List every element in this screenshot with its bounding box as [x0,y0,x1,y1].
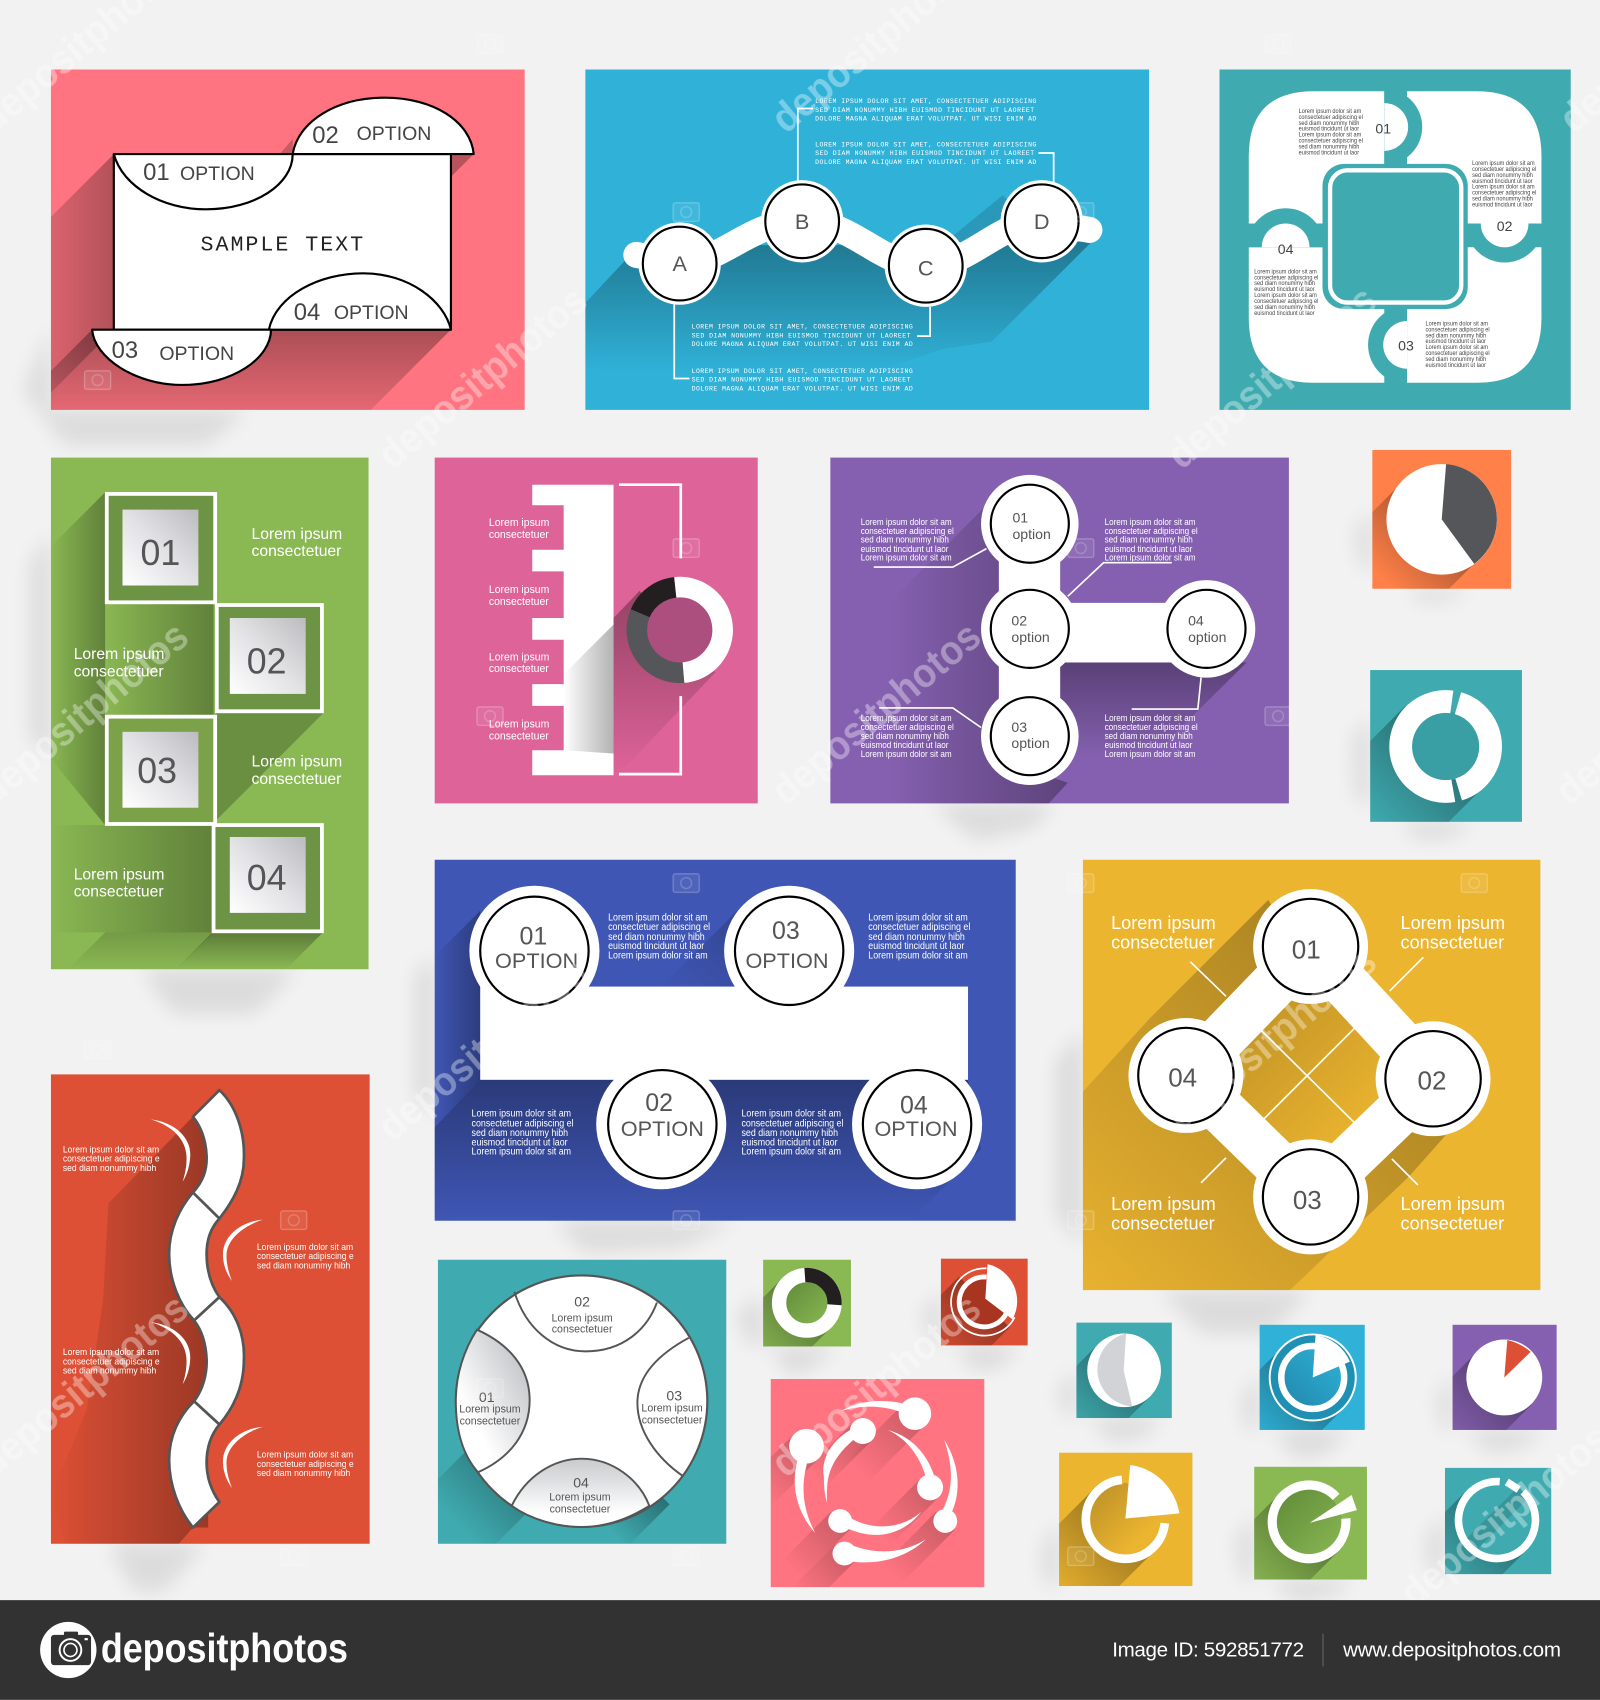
puzzle text blocks: euismod tincidunt ut laor [1299,150,1359,157]
panel: orange pie [1372,450,1511,589]
comb shadow [564,625,614,754]
indigo text: Lorem ipsum dolor sit am [741,1146,841,1157]
purple text: consectetuer adipiscing el [1105,525,1198,536]
sector 04 [512,1459,649,1527]
sample text: SAMPLE TEXT [201,233,363,258]
indigo text: Lorem ipsum dolor sit am [472,1108,571,1119]
blue text blocks: DOLORE MAGNA ALIQUAM ERAT VOLUTPAT. UT WISI ENIM AD [815,159,1036,166]
sector labels: Lorem ipsum [641,1403,703,1415]
puzzle text blocks: consectetuer adipiscing el [1472,167,1536,173]
puzzle numbers: 03 [1398,337,1414,353]
indigo text: Lorem ipsum dolor sit am [741,1108,841,1119]
puzzle text blocks: sed diam nonummy hibh [1425,357,1486,363]
shadow: timeline [585,196,1090,358]
shadow: coral shape [50,139,473,410]
step 01 [107,494,215,602]
panel: teal broken ring [1368,670,1522,823]
diamond text: consectetuer [1401,933,1504,953]
shadow: diamond [1083,900,1446,1290]
puzzle text blocks: sed diam nonummy hibh [1299,144,1359,151]
footer logo camera [40,1622,96,1678]
tree nodes [981,475,1255,785]
sector labels: 03 [666,1388,682,1404]
purple text: consectetuer adipiscing el [861,722,954,732]
puzzle text blocks [1254,109,1536,369]
green text: Lorem ipsum [74,646,164,663]
pink text: Lorem ipsum [489,584,549,596]
orbit tails [795,1401,958,1562]
nodes A B C D: A [672,251,687,276]
indigo text [472,912,970,1157]
coral labels: OPTION [334,302,409,324]
blue text blocks: LOREM IPSUM DOLOR SIT AMET, CONSECTETUER ADIPISCING [692,324,913,331]
blue text blocks: SED DIAM NONUMMY HIBH EUISMOD TINCIDUNT UT LAOREET [815,107,1034,114]
purple text: euismod tincidunt ut laor [861,543,949,554]
image id: Image ID: 592851772 [1112,1639,1304,1662]
coral labels: 04 [294,299,320,326]
purple text: Lorem ipsum dolor sit am [1105,552,1195,563]
puzzle text blocks: euismod tincidunt ut laor [1472,179,1533,185]
diamond text: Lorem ipsum [1111,1194,1216,1214]
sector labels: consectetuer [460,1416,521,1428]
puzzle text blocks: Lorem ipsum dolor sit am [1472,161,1535,167]
sector labels: Lorem ipsum [459,1404,521,1416]
green text: consectetuer [74,664,164,681]
blue text blocks: LOREM IPSUM DOLOR SIT AMET, CONSECTETUER ADIPISCING [815,141,1036,148]
puzzle text blocks: euismod tincidunt ut laor [1472,202,1533,209]
indigo text: consectetuer adipiscing el [608,922,710,932]
red text: consectetuer adipiscing e [257,1251,354,1261]
puzzle quadrants [1249,91,1541,383]
sector labels: 01 [479,1389,495,1405]
pink text: consectetuer [489,596,549,608]
shadow: wave [70,1118,208,1544]
indigo node labels: OPTION [745,948,829,973]
panel: green stairs [51,458,369,969]
puzzle tabs [1262,103,1528,369]
shadow: teal ring [1368,711,1480,823]
tree node labels: 03 [1011,719,1027,735]
footer logo wordmark: depositphotos [101,1625,348,1671]
puzzle text blocks: sed diam nonummy hibh [1472,173,1533,179]
shadow: donut [614,591,716,753]
tree connectors [999,524,1207,736]
puzzle numbers: 04 [1278,241,1294,257]
indigo text: Lorem ipsum dolor sit am [608,912,708,923]
purple text: Lorem ipsum dolor sit am [1105,748,1195,759]
red text: sed diam nonummy hibh [257,1468,350,1478]
outer soft shadows beneath panels [24,325,1545,1602]
purple text: consectetuer adipiscing el [1105,722,1198,732]
teal ring segments [1401,702,1491,791]
blue text blocks: SED DIAM NONUMMY HIBH EUISMOD TINCIDUNT UT LAOREET [815,150,1034,157]
shadow: orange pie [1382,519,1442,579]
purple text: sed diam nonummy hibh [861,730,949,741]
diamond text: Lorem ipsum [1401,1194,1505,1214]
diamond text: consectetuer [1111,933,1215,953]
puzzle text blocks: Lorem ipsum dolor sit am [1425,345,1488,351]
step 04 [214,825,322,931]
coral labels [112,122,431,365]
puzzle text blocks: euismod tincidunt ut laor [1425,339,1486,345]
puzzle text blocks: sed diam nonummy hibh [1472,196,1533,203]
watermark wordmarks: depositphotos [762,612,989,814]
sector labels: Lorem ipsum [551,1313,613,1325]
green text: Lorem ipsum [251,526,342,543]
icon: yellow pie ring [1059,1452,1192,1586]
diagonal lines [1190,957,1423,1185]
purple text: sed diam nonummy hibh [1105,534,1193,545]
puzzle text blocks: euismod tincidunt ut laor [1425,363,1486,369]
red text: consectetuer adipiscing e [257,1458,354,1469]
panel: blue timeline [575,70,1149,410]
diamond text [1111,913,1505,1233]
tree node labels: option [1011,629,1050,645]
blue text blocks: SED DIAM NONUMMY HIBH EUISMOD TINCIDUNT UT LAOREET [692,332,911,339]
panel: coral orbits [759,1379,984,1596]
coral labels: OPTION [357,123,431,145]
purple text: euismod tincidunt ut laor [1105,740,1192,750]
pink text: Lorem ipsum [489,517,549,529]
green text [74,526,342,901]
diamond numbers: 04 [1168,1062,1197,1092]
indigo node labels [495,917,958,1141]
tree node labels [1011,510,1226,751]
puzzle text blocks: Lorem ipsum dolor sit am [1254,293,1317,299]
diamond text: consectetuer [1111,1213,1215,1233]
green text: consectetuer [74,884,164,901]
pink text: consectetuer [489,528,549,541]
icon: red pie ring [940,1258,1028,1346]
indigo text: Lorem ipsum dolor sit am [868,912,968,923]
purple text: consectetuer adipiscing el [861,525,954,536]
white band [480,987,968,1080]
step 02 [217,605,322,711]
puzzle text blocks: sed diam nonummy hibh [1254,281,1315,287]
purple text: euismod tincidunt ut laor [1105,543,1192,554]
step 02: 02 [247,641,287,681]
pink text: consectetuer [489,663,549,675]
red text: Lorem ipsum dolor sit am [257,1449,353,1460]
indigo text: sed diam nonummy hibh [741,1128,838,1138]
panel: pink comb and donut [435,458,758,803]
puzzle text blocks: consectetuer adipiscing el [1299,138,1363,145]
coral labels: 01 [143,159,170,186]
red text: consectetuer adipiscing e [63,1356,160,1366]
crescents [151,1119,263,1488]
watermark wordmarks: depositphotos [762,1285,989,1486]
puzzle text blocks: euismod tincidunt ut laor [1254,287,1315,293]
red text: consectetuer adipiscing e [63,1153,160,1164]
watermark wordmarks: depositphotos [369,949,596,1150]
nodes A B C D [638,180,1083,307]
puzzle text blocks: consectetuer adipiscing el [1425,351,1490,357]
coral labels: OPTION [180,163,255,185]
timeline band [636,221,1089,266]
indigo node labels: OPTION [495,948,578,973]
green text: Lorem ipsum [251,754,342,771]
tree node labels: 02 [1011,613,1027,629]
shadow: teal circle [455,1458,650,1529]
red text: sed diam nonummy hibh [63,1162,156,1173]
puzzle text blocks: sed diam nonummy hibh [1254,305,1315,311]
coral labels: OPTION [159,343,234,365]
puzzle text blocks: sed diam nonummy hibh [1299,121,1359,127]
tree node labels: option [1188,629,1226,645]
pink text: Lorem ipsum [489,651,549,663]
purple text: Lorem ipsum dolor sit am [1105,516,1195,527]
nodes A B C D: B [795,209,809,234]
step 01: 01 [141,533,180,573]
sector labels: consectetuer [552,1323,613,1335]
puzzle text blocks: sed diam nonummy hibh [1425,333,1486,339]
indigo node labels: 02 [645,1089,673,1117]
diamond text: Lorem ipsum [1111,913,1216,933]
indigo node labels: 04 [900,1091,928,1119]
indigo text: sed diam nonummy hibh [608,932,705,942]
diamond band [1186,946,1433,1197]
shadow: tree [916,508,1246,804]
tree node labels: option [1011,735,1050,751]
puzzle text blocks: euismod tincidunt ut laor [1299,126,1359,133]
purple text: sed diam nonummy hibh [1105,730,1193,741]
diamond text: Lorem ipsum [1401,913,1505,933]
icon: green pie ring [1247,1467,1367,1585]
sector labels: Lorem ipsum [549,1491,611,1503]
step 03: 03 [137,751,177,791]
diamond text: consectetuer [1401,1213,1504,1233]
puzzle numbers [1278,120,1513,353]
blue text blocks: DOLORE MAGNA ALIQUAM ERAT VOLUTPAT. UT WISI ENIM AD [692,385,913,392]
shadow: orbits [759,1414,945,1596]
divider [1322,1634,1324,1666]
puzzle text blocks: Lorem ipsum dolor sit am [1254,269,1317,275]
leader lines [874,549,1201,728]
shadow: indigo band [435,911,981,1221]
watermark camera icons [85,35,1487,1565]
purple text [861,516,1198,759]
panel: teal puzzle [1220,70,1571,410]
indigo text: consectetuer adipiscing el [472,1118,574,1129]
indigo node labels: OPTION [621,1116,704,1141]
watermark wordmarks: depositphotos [1158,938,1385,1139]
pink text: consectetuer [489,730,549,743]
icon: teal thin ring [1445,1468,1552,1574]
diamond numbers [1168,934,1446,1215]
indigo text: sed diam nonummy hibh [472,1128,568,1138]
indigo text: Lorem ipsum dolor sit am [472,1146,571,1157]
sector labels: consectetuer [642,1414,703,1426]
connector lines [674,109,1054,378]
sector labels [459,1293,703,1515]
puzzle text blocks: consectetuer adipiscing el [1254,299,1318,305]
puzzle text blocks: consectetuer adipiscing el [1254,275,1318,281]
puzzle text blocks: Lorem ipsum dolor sit am [1299,132,1361,139]
diamond inner shadow [1186,946,1433,1197]
icon: teal grey pie [1076,1322,1172,1418]
indigo text: euismod tincidunt ut laor [472,1137,568,1147]
panel: teal circle sectors [438,1260,726,1544]
watermark wordmarks: depositphotos [1158,276,1385,477]
puzzle text blocks: Lorem ipsum dolor sit am [1299,109,1361,115]
puzzle text blocks: Lorem ipsum dolor sit am [1472,184,1535,191]
indigo text: euismod tincidunt ut laor [608,941,704,951]
bracket [619,485,681,774]
purple text: Lorem ipsum dolor sit am [861,552,952,563]
purple text: euismod tincidunt ut laor [861,740,949,750]
green text: consectetuer [251,543,341,560]
indigo text: euismod tincidunt ut laor [741,1137,838,1147]
indigo text: Lorem ipsum dolor sit am [608,950,708,960]
nodes A B C D: D [1034,209,1050,234]
red text: sed diam nonummy hibh [257,1260,350,1271]
coral labels: 03 [112,337,138,364]
panel: coral sample text [50,70,525,410]
puzzle text blocks: consectetuer adipiscing el [1472,190,1536,197]
tree node labels: 04 [1188,613,1204,629]
blue text blocks: DOLORE MAGNA ALIQUAM ERAT VOLUTPAT. UT WISI ENIM AD [815,115,1036,122]
sector 02 [514,1292,657,1351]
footer bar [0,1600,1600,1700]
red text: Lorem ipsum dolor sit am [63,1347,159,1357]
panel: yellow diamond [1041,860,1540,1290]
icon: purple red wedge pie [1452,1324,1557,1430]
step 03 [107,717,215,824]
indigo nodes [469,886,982,1189]
indigo text: euismod tincidunt ut laor [868,941,964,951]
green text: consectetuer [251,771,341,788]
sector labels: 02 [574,1293,590,1309]
purple text: Lorem ipsum dolor sit am [1105,712,1195,723]
sector labels: consectetuer [550,1503,611,1515]
sector 03 [637,1338,689,1476]
diamond numbers: 01 [1292,934,1321,964]
diamond nodes [1128,889,1491,1254]
blue text blocks: SED DIAM NONUMMY HIBH EUISMOD TINCIDUNT UT LAOREET [692,377,911,384]
red text: sed diam nonummy hibh [63,1365,156,1376]
orbit balls [789,1397,957,1565]
indigo node labels: OPTION [874,1116,958,1141]
watermark wordmarks: depositphotos [369,276,596,477]
coral labels: 02 [312,122,339,149]
pink text [489,517,549,743]
tree node labels: option [1012,526,1051,542]
puzzle numbers: 02 [1497,218,1513,234]
blue text blocks: LOREM IPSUM DOLOR SIT AMET, CONSECTETUER ADIPISCING [692,368,913,375]
coral shape body [92,98,474,385]
website: www.depositphotos.com [1342,1639,1561,1662]
donut [637,587,723,673]
puzzle notches and center [1247,89,1544,384]
sector labels: 04 [573,1474,589,1490]
panel: red wave [51,1074,370,1544]
red text: Lorem ipsum dolor sit am [257,1242,353,1252]
blue text blocks [692,98,1036,392]
purple text: Lorem ipsum dolor sit am [861,748,952,759]
blue text blocks: DOLORE MAGNA ALIQUAM ERAT VOLUTPAT. UT WISI ENIM AD [692,341,913,348]
step 04: 04 [247,858,287,898]
panel: indigo option band [435,860,1016,1221]
indigo text: Lorem ipsum dolor sit am [868,950,968,960]
green text: Lorem ipsum [74,866,164,883]
red text: Lorem ipsum dolor sit am [63,1144,159,1155]
blue text blocks: LOREM IPSUM DOLOR SIT AMET, CONSECTETUER ADIPISCING [815,98,1036,105]
puzzle text blocks: consectetuer adipiscing el [1425,327,1490,333]
icon: green donut [763,1260,851,1346]
sector circle [456,1275,707,1527]
indigo text: consectetuer adipiscing el [868,922,970,932]
diamond numbers: 02 [1418,1066,1446,1096]
puzzle text blocks: euismod tincidunt ut laor [1254,311,1315,317]
pink text: Lorem ipsum [489,718,549,731]
tree node labels: 01 [1012,510,1028,526]
sector 01 [456,1330,530,1472]
comb [532,485,614,775]
panel: purple tree [830,458,1289,824]
purple text: Lorem ipsum dolor sit am [861,712,952,723]
wave segments [169,1090,244,1528]
red text [63,1144,354,1478]
puzzle numbers: 01 [1375,120,1391,136]
purple text: Lorem ipsum dolor sit am [861,516,952,527]
indigo node labels: 03 [772,917,800,945]
indigo text: consectetuer adipiscing el [741,1118,843,1129]
center ring [1330,170,1461,303]
orange pie chart [1386,464,1497,575]
shadow: stairs [51,492,323,969]
indigo text: sed diam nonummy hibh [868,932,965,942]
nodes A B C D: C [918,255,934,280]
purple text: sed diam nonummy hibh [861,534,949,545]
puzzle text blocks: consectetuer adipiscing el [1299,115,1363,121]
indigo node labels: 01 [519,922,547,950]
diamond numbers: 03 [1293,1185,1322,1215]
puzzle text blocks: Lorem ipsum dolor sit am [1425,321,1488,327]
icon: blue ring pie [1260,1324,1365,1430]
